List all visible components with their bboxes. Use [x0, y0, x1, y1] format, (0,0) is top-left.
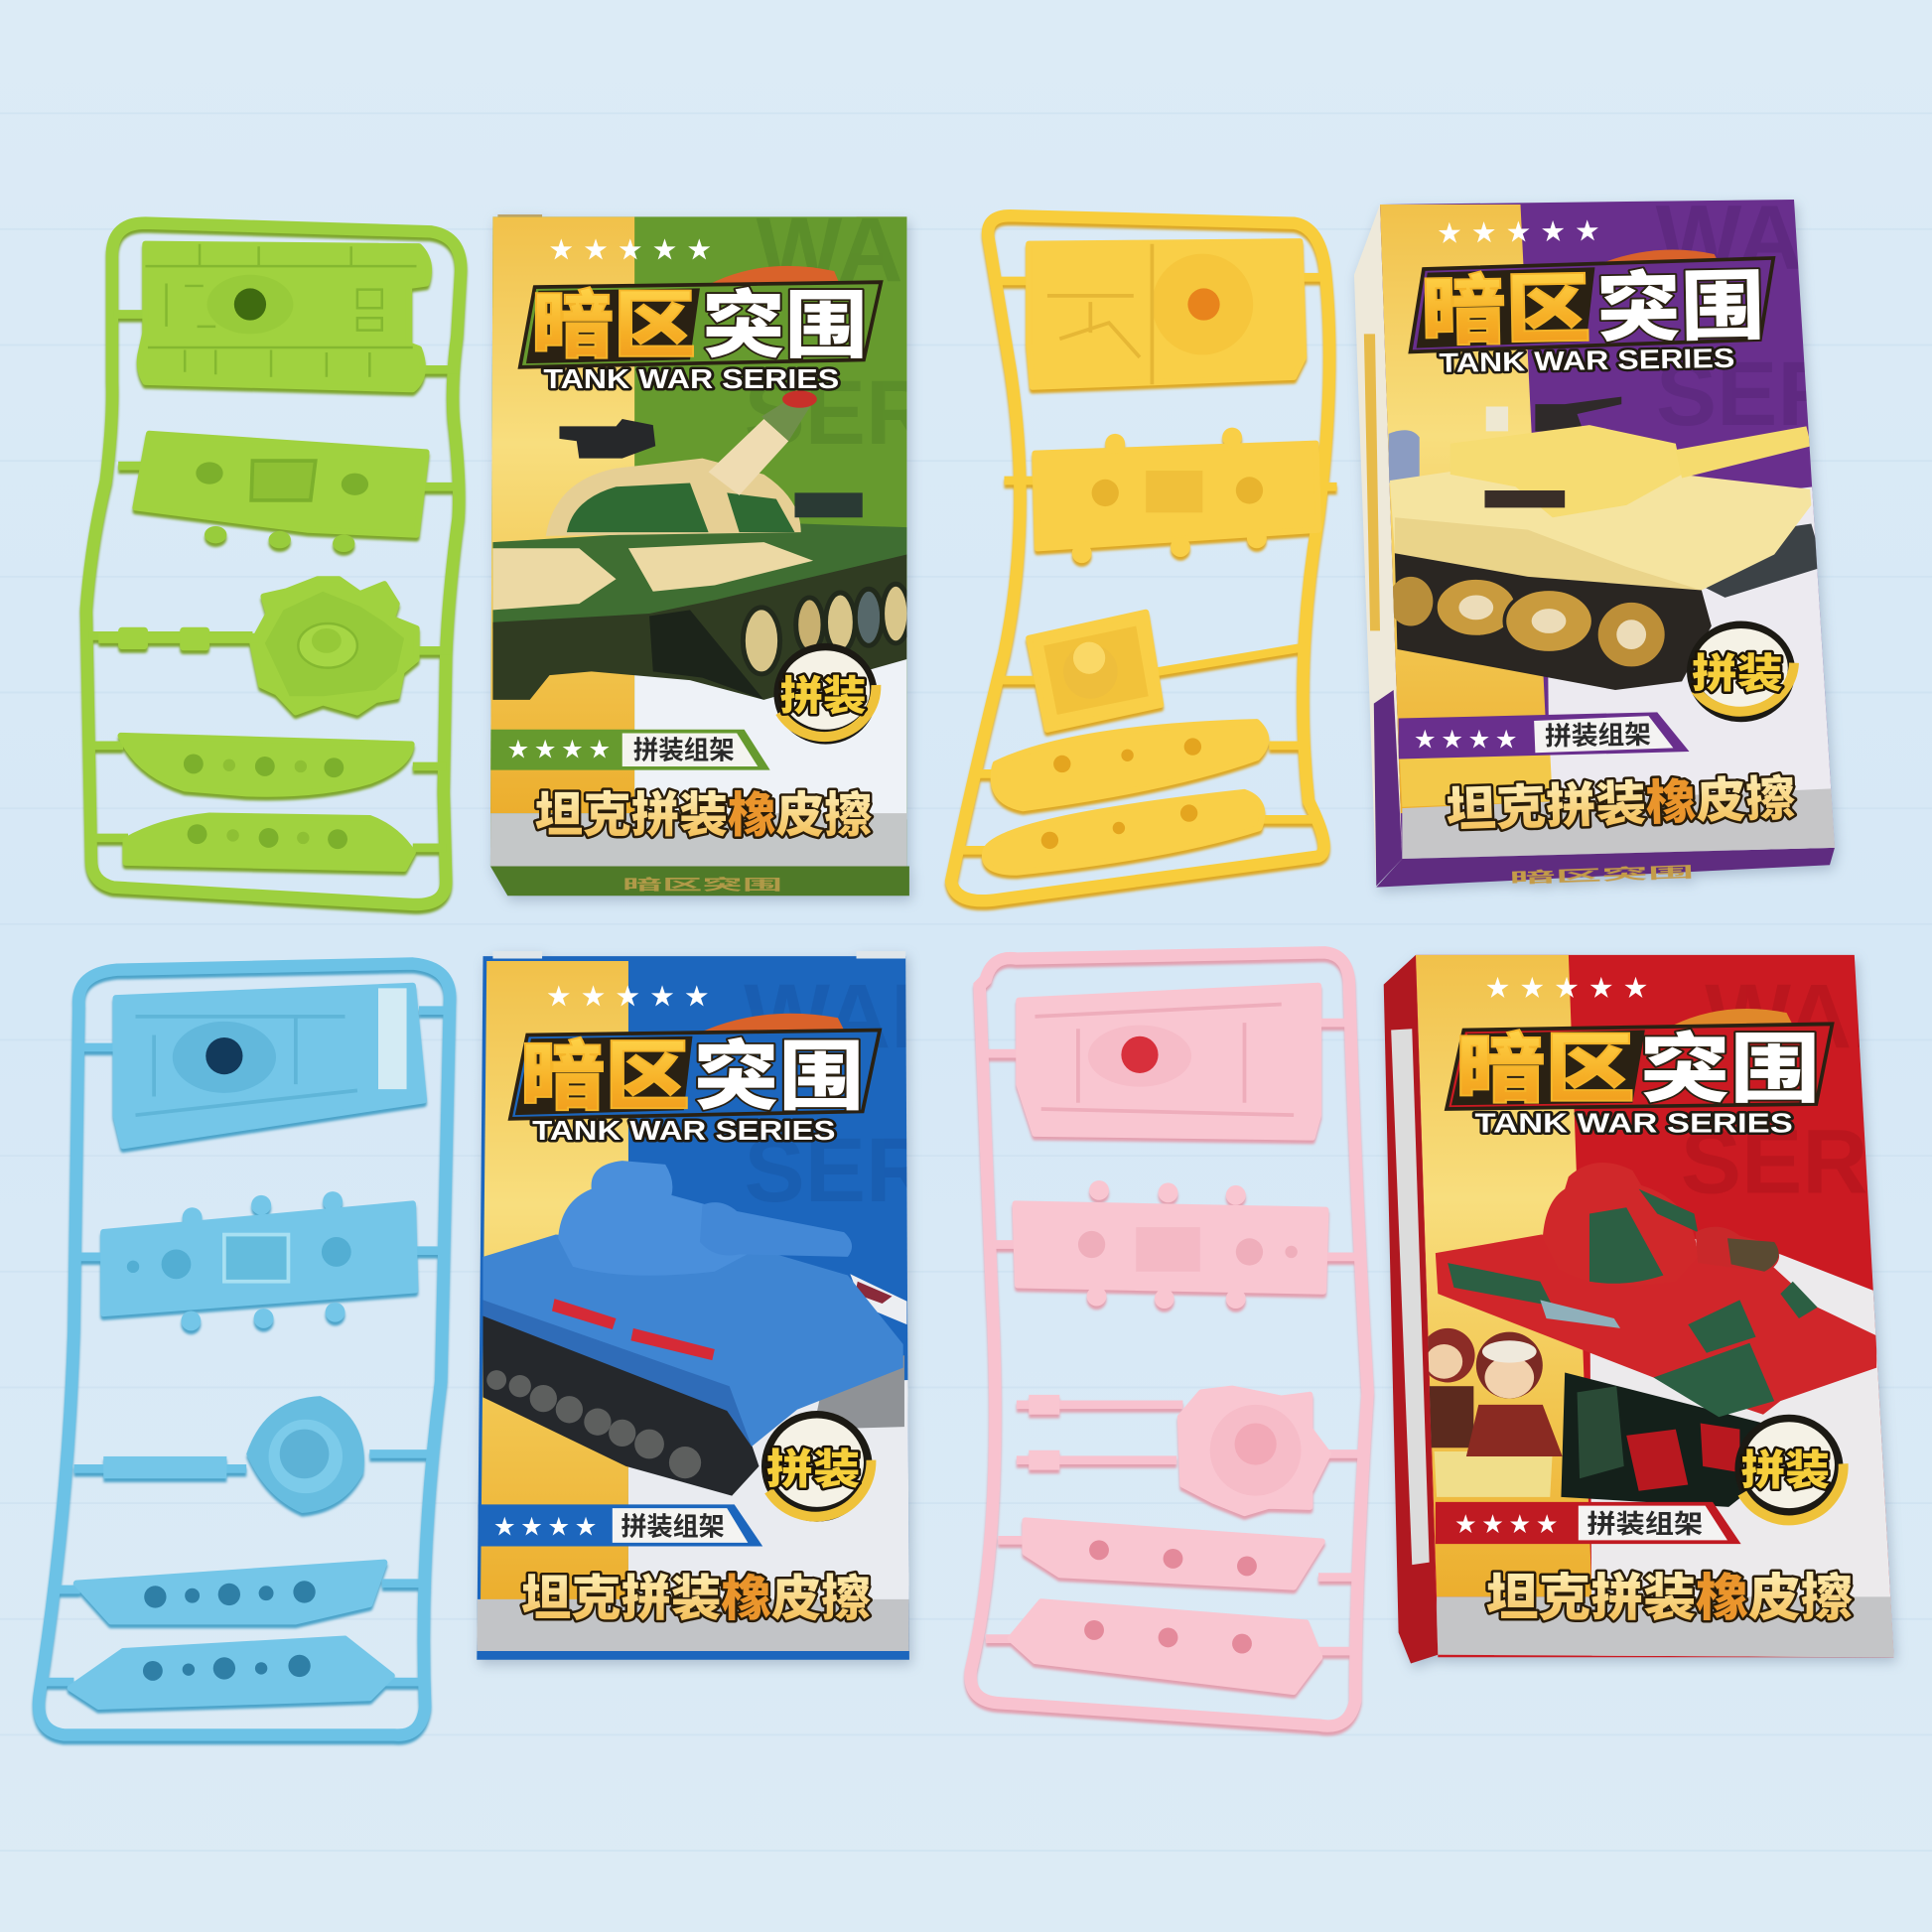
purple box lower panel: 坦克拼装橡皮擦: [1446, 771, 1797, 838]
pink hull bottom: [1016, 1180, 1325, 1309]
red box stars: ★★★★★: [1486, 975, 1658, 1001]
yellow hull top: [1029, 241, 1304, 387]
red box lower panel: 坦克拼装橡皮擦: [1486, 1570, 1854, 1626]
green box logo plate: 暗区: [531, 285, 696, 367]
purple box: [1354, 188, 1868, 888]
green box tank illustration: [492, 390, 909, 700]
purple box: SER: [1656, 344, 1844, 445]
blue eraser sprue: [39, 964, 450, 1735]
purple box lower panel: 拼装组架: [1545, 720, 1651, 752]
blue box lower panel: ★★★★: [494, 1516, 603, 1539]
green hull top: [140, 244, 429, 389]
purple box logo plate: 突围: [1596, 264, 1765, 351]
blue box badge: 拼装: [766, 1446, 860, 1492]
green box: [488, 213, 917, 905]
red box: WAR: [1705, 966, 1918, 1067]
red box figures: [1421, 1328, 1563, 1497]
yellow tracks: [985, 722, 1266, 873]
purple box subtitle: TANK WAR SERIES: [1439, 343, 1735, 378]
pink turret gear: [1029, 1389, 1328, 1513]
green box lower panel: 坦克拼装橡皮擦: [535, 789, 873, 843]
blue turret: [103, 1396, 364, 1513]
red box logo plate: [1447, 1009, 1832, 1112]
red box: SER: [1681, 1111, 1868, 1212]
blue box subtitle: TANK WAR SERIES: [532, 1115, 835, 1146]
blue box logo plate: [510, 1014, 880, 1120]
blue box: [477, 951, 956, 1660]
red box badge: 拼装: [1741, 1447, 1830, 1493]
red box lower panel: [1436, 1502, 1897, 1657]
green box lower panel: 拼装组架: [633, 735, 735, 764]
purple box lower panel: [1399, 712, 1839, 863]
blue box badge: [761, 1411, 873, 1522]
pink tracks: [1011, 1520, 1322, 1692]
red box lower panel: 拼装组架: [1587, 1509, 1703, 1539]
green box logo plate: 突围: [702, 285, 868, 367]
green box stars: ★★★★★: [550, 236, 722, 262]
green box: SER: [745, 362, 931, 464]
blue box: WAR: [744, 966, 956, 1067]
red box badge: [1734, 1415, 1844, 1523]
blue box lower panel: [477, 1504, 909, 1651]
yellow hull bottom: [1035, 428, 1318, 563]
green box logo plate: [520, 266, 881, 367]
purple box logo plate: [1409, 248, 1775, 355]
green box lower panel: ★★★★: [507, 739, 616, 761]
red box: [1384, 955, 1918, 1663]
red box subtitle: TANK WAR SERIES: [1475, 1108, 1793, 1139]
red box logo plate: 暗区: [1455, 1027, 1635, 1112]
pink eraser sprue: [971, 952, 1368, 1726]
purple box: WAR: [1656, 188, 1868, 289]
green eraser sprue: [86, 223, 461, 904]
purple box badge: [1687, 621, 1795, 722]
blue hull top: [116, 986, 424, 1146]
green tracks: [121, 736, 413, 869]
red box lower panel: ★★★★: [1455, 1514, 1564, 1537]
green hull bottom: [136, 434, 426, 552]
blue tracks: [70, 1563, 392, 1707]
purple box badge: 拼装: [1692, 651, 1783, 697]
pink hull top: [1019, 986, 1318, 1138]
blue box lower panel: 坦克拼装橡皮擦: [521, 1571, 871, 1626]
yellow eraser sprue: [951, 215, 1337, 900]
green box badge: 拼装: [780, 673, 867, 719]
purple box stars: ★★★★★: [1438, 217, 1610, 247]
green box: WAR: [757, 200, 969, 301]
green box bottom flap text: 暗区突围: [622, 876, 782, 894]
green box badge: [773, 643, 878, 745]
blue box logo plate: 暗区: [520, 1035, 690, 1120]
green box subtitle: TANK WAR SERIES: [543, 363, 839, 394]
red box tank illustration: [1436, 1163, 1876, 1507]
green turret gear: [98, 579, 416, 712]
purple box tank illustration: [1389, 397, 1824, 690]
purple box lower panel: ★★★★: [1415, 729, 1523, 752]
purple box bottom flap text: 暗区突围: [1509, 863, 1695, 887]
green box lower panel: [490, 730, 909, 866]
blue box logo plate: 突围: [694, 1035, 864, 1120]
blue hull bottom: [103, 1191, 415, 1330]
blue box stars: ★★★★★: [547, 983, 720, 1009]
red box logo plate: 突围: [1640, 1027, 1820, 1112]
yellow turret: [1029, 613, 1161, 730]
blue box: SER: [745, 1120, 931, 1221]
blue box lower panel: 拼装组架: [621, 1511, 725, 1541]
blue box tank illustration: [483, 1161, 903, 1496]
purple box logo plate: 暗区: [1420, 267, 1591, 355]
